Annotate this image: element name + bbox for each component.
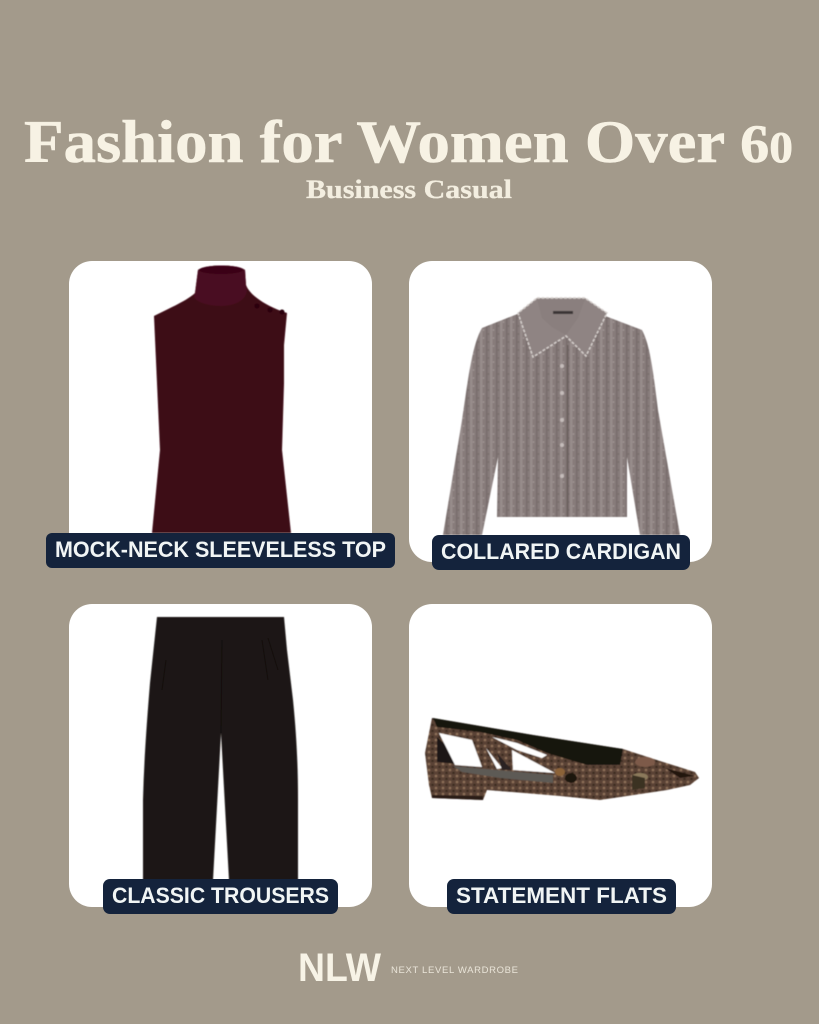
- panel: collared cardigan: [409, 261, 712, 570]
- item: snakeskin flat shoe: [425, 718, 699, 800]
- label: collared cardigan: COLLARED CARDIGAN: [441, 539, 681, 564]
- logo: NLW: NLW: [298, 946, 381, 990]
- subtitle: Business Casual: [306, 175, 512, 204]
- panel: statement flats: [409, 604, 712, 914]
- card background: [409, 604, 712, 907]
- card background: [69, 261, 372, 562]
- card background: [69, 604, 372, 907]
- collar: [518, 298, 607, 357]
- panel: mock-neck sleeveless top: [46, 261, 395, 568]
- label: mock-neck sleeveless top: [46, 533, 395, 568]
- label: classic trousers: CLASSIC TROUSERS: [112, 883, 329, 908]
- garment: burgundy top: [152, 266, 291, 533]
- card background: [409, 261, 712, 562]
- label: mock-neck sleeveless top: MOCK-NECK SLEEVELESS TOP: [55, 537, 386, 562]
- logo: NLW: NEXT LEVEL WARDROBE: [391, 965, 518, 976]
- garment: grey cardigan: [443, 298, 680, 535]
- title: Fashion for Women Over 60: [24, 109, 793, 175]
- label: statement flats: [447, 879, 676, 914]
- label: statement flats: STATEMENT FLATS: [456, 883, 667, 908]
- label: collared cardigan: [432, 535, 690, 570]
- label: classic trousers: [103, 879, 338, 914]
- garment: black trousers: [143, 617, 298, 880]
- logo: NLW: [298, 946, 518, 990]
- panel: classic trousers: [69, 604, 372, 914]
